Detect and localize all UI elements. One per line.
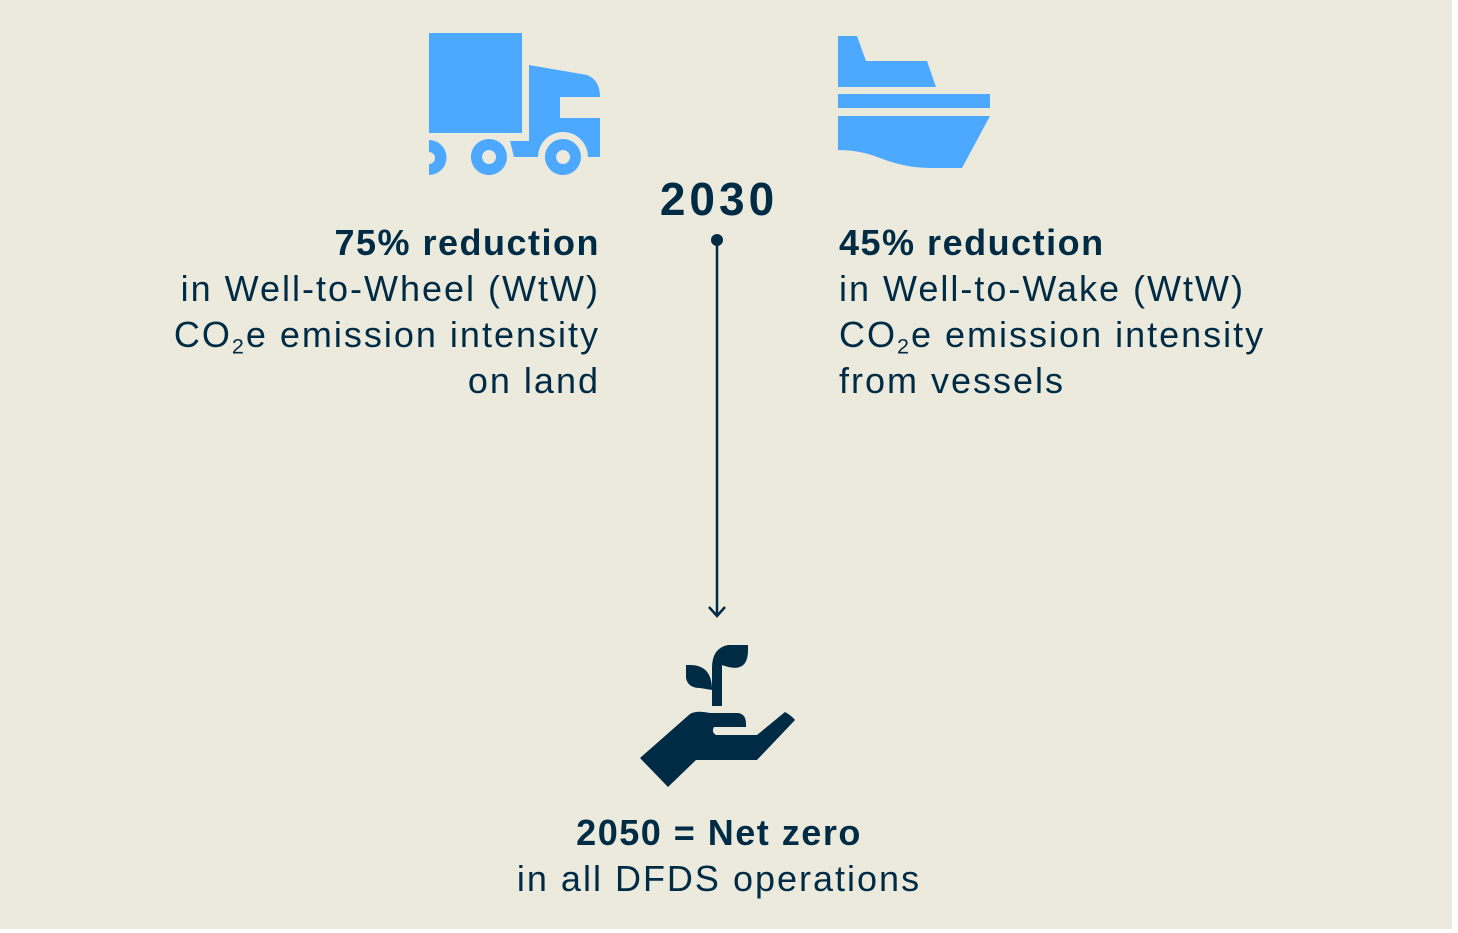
text block: vessel target: CO2e emission intensity	[839, 314, 1265, 358]
text block: land target: 75% reduction	[334, 222, 600, 263]
text block: 2050 net zero: 2050 = Net zero	[576, 812, 862, 853]
text block: land target: on land	[468, 360, 600, 401]
text block: 2050 net zero: in all DFDS operations	[517, 858, 921, 899]
arrow: timeline 2030 to 2050	[708, 234, 726, 618]
text block: vessel target: from vessels	[839, 360, 1065, 401]
text block: 2050 net zero	[517, 812, 921, 899]
heading: 2030: 2030	[660, 173, 778, 225]
text block: land target: in Well-to-Wheel (WtW)	[181, 268, 600, 309]
text block: vessel target: in Well-to-Wake (WtW)	[839, 268, 1245, 309]
text block: vessel target	[839, 222, 1265, 401]
text block: land target: CO2e emission intensity	[174, 314, 600, 358]
text block: land target	[174, 222, 600, 401]
text block: vessel target: 45% reduction	[839, 222, 1105, 263]
